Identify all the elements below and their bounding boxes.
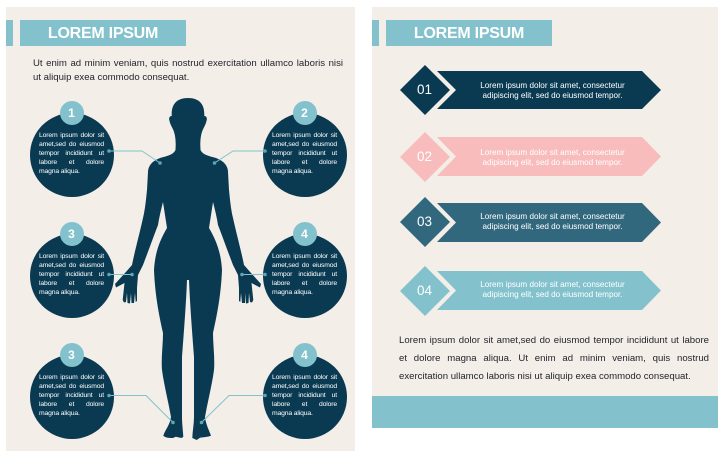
callout 1: amet,sed do eiusmod — [39, 141, 104, 148]
callout 6: tempor incididunt ut — [272, 392, 337, 399]
footer band — [372, 396, 718, 428]
callout 1: labore et dolore — [39, 159, 104, 166]
step 04: 04 — [417, 283, 432, 298]
summary text: et dolore magna aliqua. Ut enim ad minim veniam, quis nostrud — [399, 353, 709, 364]
callout 5: amet,sed do eiusmod — [39, 383, 104, 390]
callout 5: 3 — [68, 348, 75, 362]
panel: right — [372, 7, 718, 396]
step 03 — [400, 197, 661, 247]
heading: right panel — [386, 20, 552, 46]
callout 2: labore et dolore — [272, 159, 337, 166]
callout 5: Lorem ipsum dolor sit — [39, 374, 104, 381]
callout 2: tempor incididunt ut — [272, 150, 337, 157]
step 01: Lorem ipsum dolor sit amet, consectetur — [480, 81, 625, 90]
callout 3: 3 — [68, 227, 75, 241]
step 03: Lorem ipsum dolor sit amet, consectetur — [480, 212, 625, 221]
callout 2: amet,sed do eiusmod — [272, 141, 337, 148]
callout 6: Lorem ipsum dolor sit — [272, 374, 337, 381]
callout 3: magna aliqua. — [39, 289, 80, 296]
step 02: Lorem ipsum dolor sit amet, consectetur — [480, 148, 625, 156]
callout 1: tempor incididunt ut — [39, 150, 104, 157]
callout 2 — [263, 101, 347, 197]
callout 6: amet,sed do eiusmod — [272, 383, 337, 390]
step 01: 01 — [417, 82, 432, 97]
step 04 — [400, 266, 661, 316]
callout 4: Lorem ipsum dolor sit — [272, 253, 337, 260]
callout 4: tempor incididunt ut — [272, 271, 337, 278]
step 01 — [400, 65, 661, 115]
heading: left panel: LOREM IPSUM — [48, 25, 158, 42]
step 04: Lorem ipsum dolor sit amet, consectetur — [480, 280, 625, 289]
callout 5 — [30, 343, 114, 439]
callout 2: Lorem ipsum dolor sit — [272, 132, 337, 139]
callout 3: labore et dolore — [39, 280, 104, 287]
header tab right — [372, 20, 379, 46]
callout 3 — [30, 222, 114, 318]
callout 3: Lorem ipsum dolor sit — [39, 253, 104, 260]
callout 4: 4 — [301, 227, 308, 241]
heading: right panel: LOREM IPSUM — [414, 25, 524, 42]
callout 3: tempor incididunt ut — [39, 271, 104, 278]
summary text — [399, 335, 709, 382]
callout 4 — [263, 222, 347, 318]
callout 4: amet,sed do eiusmod — [272, 262, 337, 269]
callout 6 — [263, 343, 347, 439]
callout 6: labore et dolore — [272, 401, 337, 408]
callout 5: magna aliqua. — [39, 410, 80, 417]
heading: left panel — [20, 20, 186, 46]
step 03: 03 — [417, 214, 432, 229]
callout 6: magna aliqua. — [272, 410, 313, 417]
intro text — [33, 58, 343, 83]
callout 5: tempor incididunt ut — [39, 392, 104, 399]
callout 2: magna aliqua. — [272, 168, 313, 175]
callout 2: 2 — [301, 106, 308, 120]
callout 6: 4 — [301, 348, 308, 362]
step 02: 02 — [417, 149, 432, 164]
callout 1: 1 — [68, 106, 75, 120]
callout 3: amet,sed do eiusmod — [39, 262, 104, 269]
callout 4: labore et dolore — [272, 280, 337, 287]
step 04: adipiscing elit, sed do eiusmod tempor. — [482, 290, 622, 299]
summary text: Lorem ipsum dolor sit amet,sed do eiusmod tempor incididunt ut labore — [399, 335, 709, 346]
intro text: Ut enim ad minim veniam, quis nostrud exercitation ullamco laboris nisi — [33, 58, 343, 69]
step 02 — [400, 132, 661, 182]
callout 5: labore et dolore — [39, 401, 104, 408]
step 02: adipiscing elit, sed do eiusmod tempor. — [482, 158, 622, 166]
summary text: exercitation ullamco laboris nisi ut aliquip exea commodo consequat. — [399, 371, 691, 382]
panel: left — [6, 7, 355, 451]
step 01: adipiscing elit, sed do eiusmod tempor. — [482, 91, 622, 100]
callout 1: Lorem ipsum dolor sit — [39, 132, 104, 139]
header tab left — [6, 20, 13, 46]
callout 1 — [30, 101, 114, 197]
callout 4: magna aliqua. — [272, 289, 313, 296]
callout 1: magna aliqua. — [39, 168, 80, 175]
intro text: ut aliquip exea commodo consequat. — [33, 72, 189, 83]
step 03: adipiscing elit, sed do eiusmod tempor. — [482, 222, 622, 231]
